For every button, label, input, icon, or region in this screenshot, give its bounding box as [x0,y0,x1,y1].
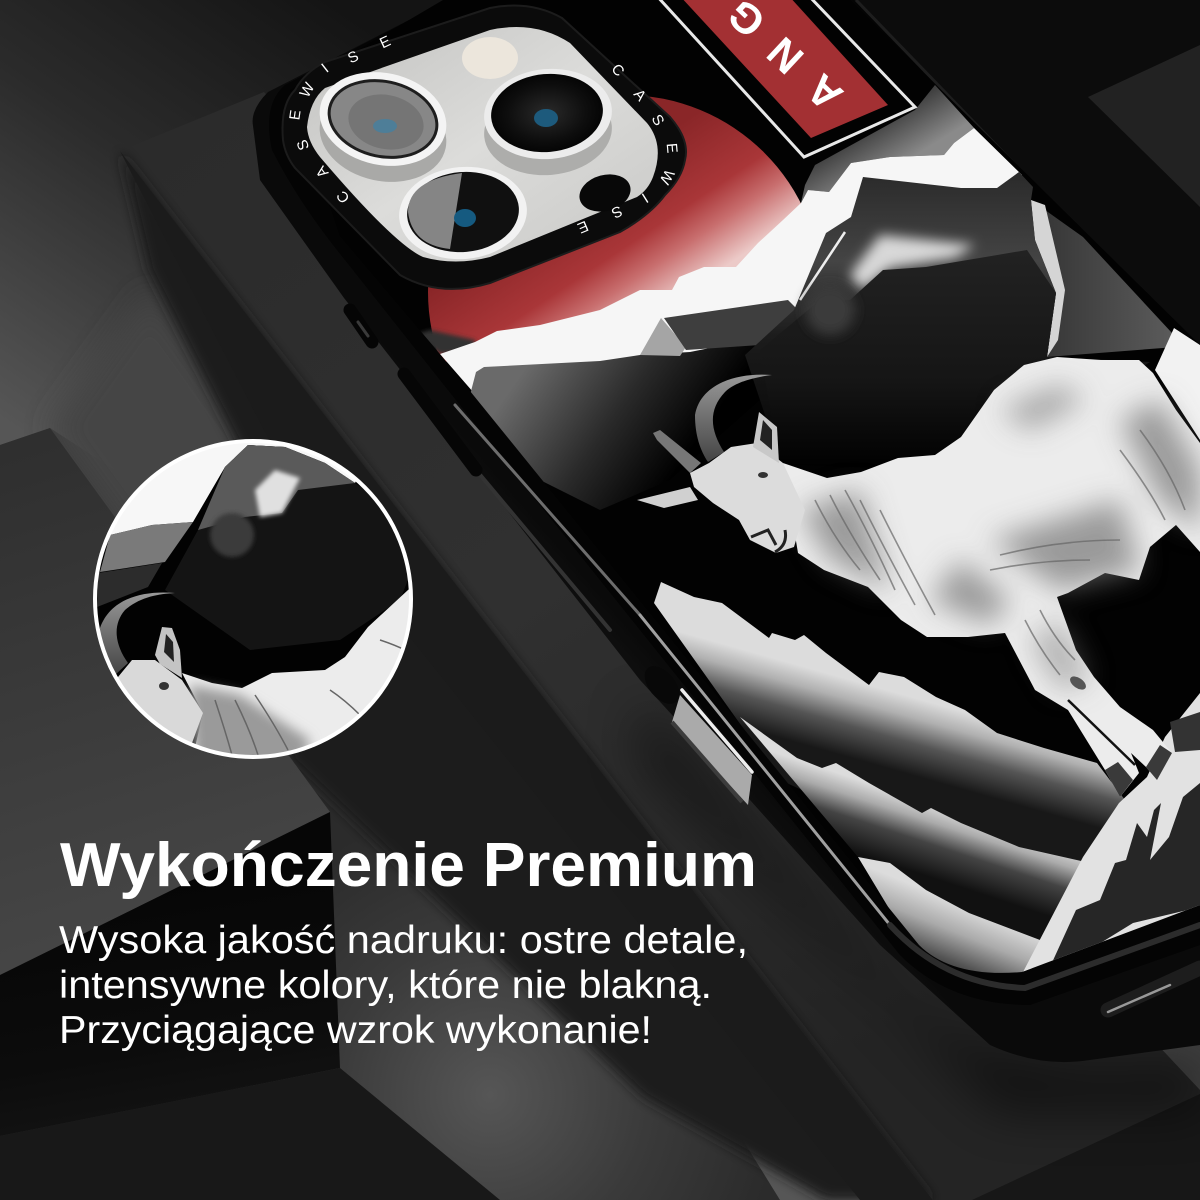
island lettering: A [630,86,649,105]
artwork: right grey mountain [1031,200,1200,440]
island lettering: I [638,189,651,206]
title: Wykończenie Premium [60,831,757,900]
artwork: lower ridge 2 [740,717,1090,945]
artwork: left mountain range [470,300,800,510]
island lettering: A [313,163,332,181]
artwork: red logo banner: A [797,65,851,120]
goat fur shading [800,385,1200,690]
island lettering: E [286,109,305,121]
circle: mountain patch [210,513,254,557]
island lettering: W [655,166,677,188]
body text: Wysoka jakość nadruku: ostre detale, [59,919,748,962]
island lettering: S [345,48,361,67]
island lettering: E [575,217,591,236]
circle: goat head [100,660,203,765]
phone front face [269,0,1200,1005]
microphone [575,169,635,217]
circle: goat ear [155,627,182,678]
island outer ring [282,6,686,289]
island lettering: S [609,202,625,221]
camera glass [307,27,658,262]
circle: upper mountain [165,445,412,650]
island lettering: E [663,142,680,154]
goat horn front [653,430,701,473]
phone case body [253,0,1200,1062]
circle: white sky [110,443,356,535]
island lettering: W [297,79,319,101]
circle: goat ear inner [164,634,174,662]
circle: peak highlight [255,470,300,517]
printed artwork [100,0,1200,973]
circle: goat eye [159,682,169,690]
goat head [690,443,805,553]
circle border [95,441,411,757]
circle: neck fur shading [190,685,310,770]
goat leg gap and hooves [1068,674,1172,797]
artwork: red logo banner [656,0,915,157]
circle: dark foothill [97,563,162,607]
circle: lit peak [198,445,355,530]
goat left ear [637,487,698,508]
artwork: red logo banner: N [758,28,812,83]
flash [462,37,518,79]
artwork: big mountain [745,172,1150,428]
island lettering: I [318,60,332,76]
artwork: lower ridge 1 [654,582,1125,880]
case right edge highlight [856,0,1200,356]
artwork: lower ridge 3 [858,857,1040,985]
circle: fur strokes [215,640,405,755]
goat ear inner [760,420,772,450]
artwork: dark mist at left of sun [415,330,475,354]
goat horn back [695,375,772,462]
circle: goat body [182,589,409,748]
lens: bottom [395,162,531,264]
island lettering: S [648,112,667,129]
body text: intensywne kolory, które nie blakną. [59,964,712,1007]
goat fur strokes [815,430,1185,675]
phone shadow [640,700,1200,1110]
zoom detail circle [90,435,420,770]
goat nose and mouth [751,530,786,552]
goat eye [758,472,768,478]
artwork: white rock with dark drips [1022,693,1200,974]
island lettering: C [608,61,628,80]
goat top ear [753,412,779,463]
lens: right [480,64,616,180]
goat body and legs [783,357,1200,797]
glossy rim highlights [430,405,1200,988]
body text: Przyciągające wzrok wykonanie! [59,1009,652,1052]
body text [59,919,748,1052]
lens: top left [311,61,455,193]
island lettering [286,33,680,236]
artwork: red sun [428,96,801,362]
artwork: goat [637,357,1200,797]
circle: grey foothill [100,522,193,572]
circle: horn [100,592,175,675]
island lettering: E [377,33,393,52]
side buttons [350,310,1200,1012]
island lettering: S [294,137,313,152]
artwork: grey mist under banner [801,85,985,203]
island lettering: C [333,187,353,206]
artwork: white mist band [440,128,1022,400]
camera island [282,6,686,289]
